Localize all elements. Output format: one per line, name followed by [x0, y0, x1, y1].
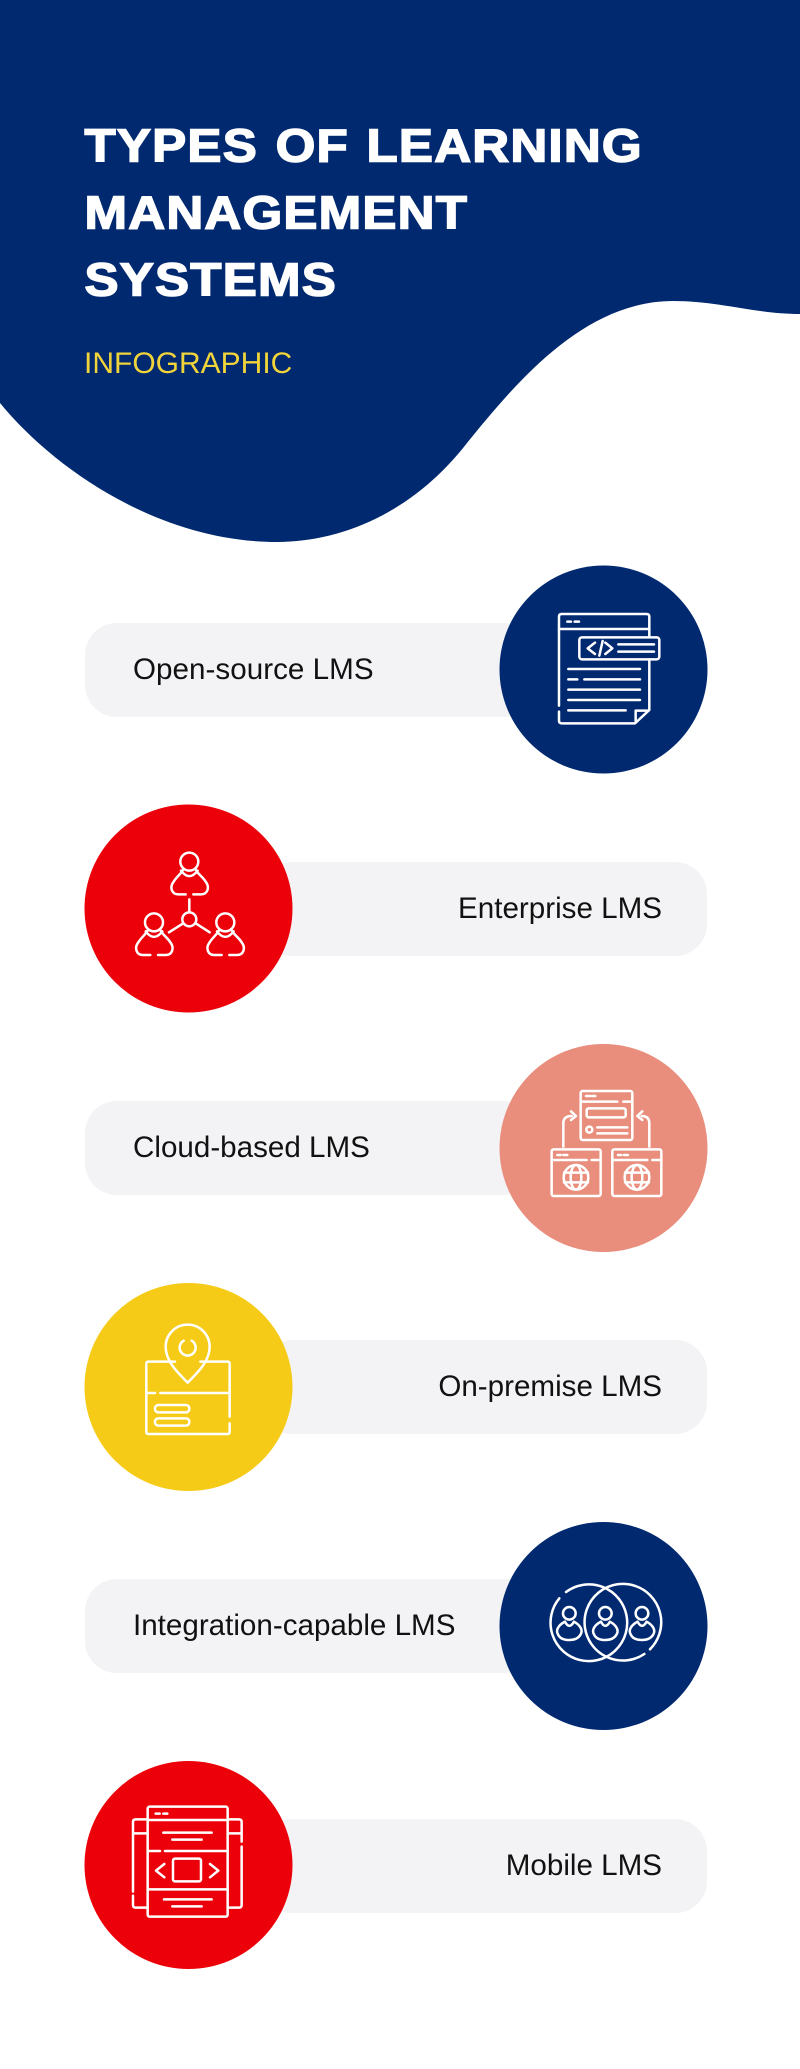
- label: open-source: Open-source LMS: [133, 653, 374, 686]
- circle: enterprise: [84, 804, 292, 1012]
- title: TYPES OF LEARNING: [84, 121, 643, 172]
- icon: code document: [559, 614, 659, 723]
- circle: open-source: [500, 566, 708, 774]
- label: integration-capable: Integration-capable LMS: [133, 1609, 455, 1642]
- label: cloud-based: Cloud-based LMS: [133, 1131, 370, 1164]
- pill: enterprise: [260, 862, 707, 956]
- pill: mobile: [260, 1819, 707, 1913]
- row: mobile LMS: [84, 1761, 707, 1969]
- row: open-source LMS: [85, 566, 708, 774]
- label: enterprise: Enterprise LMS: [458, 892, 662, 925]
- pill: cloud-based: [85, 1101, 535, 1195]
- circle: cloud-based: [500, 1044, 708, 1252]
- pill: open-source: [85, 623, 535, 717]
- pill: on-premise: [260, 1340, 707, 1434]
- icon: overlapping user circles: [551, 1584, 661, 1661]
- title: SYSTEMS: [84, 255, 337, 306]
- circle: mobile: [84, 1761, 292, 1969]
- title: MANAGEMENT: [84, 188, 468, 239]
- circle: on-premise: [84, 1283, 292, 1491]
- header wave background: [0, 0, 800, 542]
- label: on-premise: On-premise LMS: [438, 1370, 662, 1403]
- subtitle: INFOGRAPHIC: [84, 347, 292, 380]
- row: integration-capable LMS: [85, 1522, 708, 1730]
- icon: location pin on box: [146, 1325, 230, 1434]
- row: cloud-based LMS: [85, 1044, 708, 1252]
- icon: connected people: [136, 853, 244, 955]
- row: on-premise LMS: [84, 1283, 707, 1491]
- circle: integration-capable: [500, 1522, 708, 1730]
- label: mobile: Mobile LMS: [506, 1849, 662, 1882]
- icon: connected browser windows: [552, 1091, 661, 1196]
- pill: integration-capable: [85, 1579, 535, 1673]
- icon: layered web windows: [133, 1807, 242, 1917]
- row: enterprise LMS: [84, 804, 707, 1012]
